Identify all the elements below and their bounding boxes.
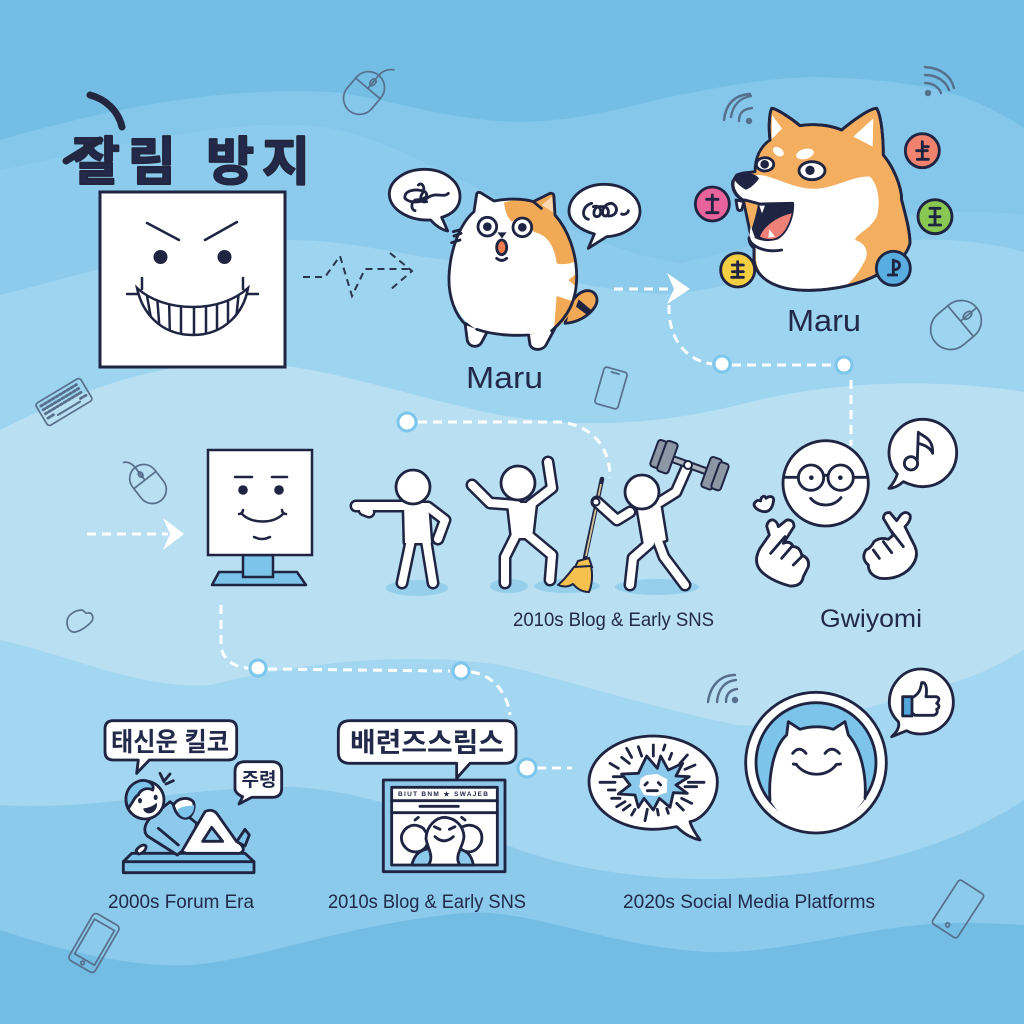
icon: mouse right	[922, 292, 990, 358]
icon: phone bottom left	[68, 912, 120, 974]
bubble text: headline: 배련즈스림스	[350, 728, 504, 758]
path: node to broom	[398, 413, 610, 478]
icon: mouse left	[117, 450, 172, 509]
path: node to speech bubble	[518, 759, 572, 777]
panel: monitor face	[208, 450, 312, 585]
tail	[565, 291, 597, 323]
mouth	[752, 203, 793, 240]
panel: stick figures	[356, 437, 730, 596]
bubble left	[389, 169, 460, 231]
figure dancing	[472, 462, 552, 583]
label: Maru shiba: Maru	[787, 303, 861, 338]
torso and arm	[145, 802, 197, 855]
head outline again for crisp edge	[754, 108, 910, 290]
eyes	[756, 158, 774, 171]
title	[66, 95, 310, 192]
panel: avatar and like bubble	[746, 669, 953, 833]
label: Maru cat: Maru	[466, 360, 543, 395]
icon: wifi bottom	[708, 675, 738, 703]
icon: wifi top right	[925, 67, 954, 96]
bubble: main	[105, 721, 237, 773]
path: nodes to Gwiyomi	[714, 356, 852, 446]
bubble: small	[235, 762, 282, 804]
label: 2020s: 2020s Social Media Platforms	[623, 892, 875, 913]
meme art	[412, 848, 473, 865]
bubble: like	[889, 669, 953, 737]
figure pointing	[356, 503, 445, 583]
path: lower row connector	[221, 605, 510, 715]
window small text: BIUT BNM ★ SWAJEB	[398, 791, 488, 798]
icon: wifi top left	[724, 94, 752, 124]
bubble: headline	[338, 721, 516, 778]
bubble text: main: 태신운 킬코	[111, 727, 229, 757]
panel: forum era lying man	[105, 721, 282, 873]
title: 잘림 방지	[72, 134, 310, 192]
label: 2010s middle: 2010s Blog & Early SNS	[513, 609, 714, 631]
label: 2010s lower: 2010s Blog & Early SNS	[328, 892, 526, 913]
panel: surprised cat Maru	[389, 169, 640, 349]
bubble right	[569, 184, 640, 248]
panel: Gwiyomi	[754, 419, 957, 586]
arrow: white dashed to shiba	[614, 273, 712, 364]
label: Gwiyomi: Gwiyomi	[820, 605, 922, 633]
bubble: music	[889, 419, 957, 488]
panel: grinning square face	[100, 192, 285, 367]
panel: explosion speech bubble	[589, 736, 717, 840]
figure lifting	[597, 467, 687, 585]
icon: phone centre	[594, 366, 628, 410]
icon: mouse blob	[67, 610, 93, 632]
right finger heart	[864, 512, 916, 579]
ears inner	[772, 115, 782, 139]
bubble text: small: 주령	[242, 769, 276, 791]
icon: dumbbell	[649, 437, 730, 493]
cat body	[449, 192, 577, 335]
arrow: squiggle dashed	[303, 253, 412, 296]
arrow: white dashed to monitor	[87, 518, 184, 550]
panel: blog window with meme	[338, 721, 516, 872]
nose	[733, 173, 759, 190]
legs	[182, 810, 243, 853]
panel: shiba Maru with coins	[695, 108, 952, 290]
icon: broom	[558, 479, 602, 592]
label: 2000s: 2000s Forum Era	[108, 892, 254, 913]
coins	[695, 134, 952, 287]
feet	[465, 323, 487, 346]
platform	[123, 853, 254, 873]
icon: small heart	[754, 496, 774, 512]
icon: phone bottom right	[931, 879, 985, 939]
left finger heart	[757, 520, 809, 586]
cat face	[478, 217, 497, 236]
window	[383, 780, 505, 872]
shadows	[386, 579, 699, 596]
icon: keyboard	[35, 377, 93, 427]
icon: mouse top	[337, 54, 400, 121]
hand	[173, 798, 194, 818]
head	[126, 781, 164, 819]
